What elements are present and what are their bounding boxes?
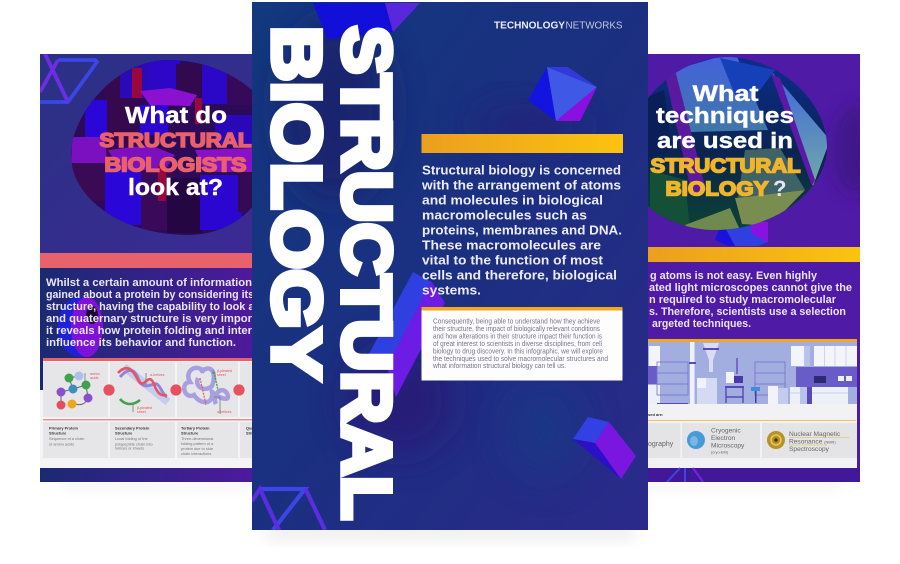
card captions: protein due to side <box>181 446 213 451</box>
card captions: Quaternary <box>246 426 268 430</box>
text: protein structure intro: Whilst a certain amount of information <box>46 277 252 289</box>
icon: ring shape behind text <box>58 297 103 357</box>
callout: white text box <box>422 307 622 380</box>
panel: centre cover page <box>252 2 648 530</box>
card captions: Sequence of a chain <box>49 436 84 441</box>
callout: white text box: the techniques used to solve macromolecular structures and <box>433 356 608 363</box>
diagram: secondary structure: β-pleated <box>137 406 152 410</box>
card: cryo-EM <box>682 423 760 458</box>
page shadow <box>60 474 840 540</box>
gold heading bar <box>422 134 623 153</box>
diagram: tertiary structure <box>184 368 232 414</box>
title: What techniques are used in Structural Biology: BIOLOGY <box>666 178 769 200</box>
diagram: primary structure <box>56 372 100 410</box>
title: What do Structural Biologists look at: BIOLOGISTS <box>104 154 246 176</box>
title: What do Structural Biologists look at: look at? <box>128 174 223 200</box>
panel: left page <box>40 54 268 482</box>
card captions: Secondary Protein <box>115 426 150 430</box>
card captions: chain interactions <box>181 451 211 456</box>
text: main description: systems. <box>422 282 481 298</box>
card captions: helices or sheets <box>115 446 144 450</box>
diagram: primary structure: amino <box>90 372 100 376</box>
card: NMR <box>762 423 857 458</box>
text: protein structure intro: gained about a protein by considering its <box>46 289 254 301</box>
title: What techniques are used in Structural Biology: ? <box>773 176 786 201</box>
text: main description <box>421 162 622 298</box>
text: protein structure intro <box>46 277 258 349</box>
card captions: Local folding of the <box>115 436 148 441</box>
logo: Technology Networks: TECHNOLOGY <box>494 20 565 32</box>
card captions: Tertiary Protein <box>181 426 210 430</box>
diagram: secondary structure <box>118 367 168 414</box>
text: protein structure intro: it reveals how protein folding and inter <box>46 325 253 337</box>
card captions: folding pattern of a <box>181 441 214 446</box>
title: What techniques are used in Structural Biology: techniques <box>656 103 794 128</box>
text: protein structure intro: structure, having the capability to look at <box>46 301 258 313</box>
text: techniques intro: s. Therefore, scientists use a selection <box>649 306 846 318</box>
diagram: tertiary structure: α-helices <box>217 410 232 414</box>
text: techniques intro: g atoms is not easy. Even highly <box>650 270 818 282</box>
text: main description: vital to the function of most <box>422 252 604 268</box>
title: Structural Biology vertical: STRUCTURAL <box>328 26 405 520</box>
text: main description: These macromolecules are <box>422 238 601 252</box>
diagram: primary structure: acids <box>90 376 99 380</box>
diagram: tertiary structure: β-pleated <box>217 369 232 373</box>
card captions: Primary Protein <box>49 426 79 430</box>
callout: white text box: their structure, the impact of biologically relevant conditions <box>433 326 600 333</box>
title: What techniques are used in Structural Biology: What <box>692 81 759 106</box>
text: main description: with the arrangement of atoms <box>421 178 621 192</box>
text: main description: Structural biology is concerned <box>422 162 621 178</box>
image: blob of molecular columns <box>71 60 252 235</box>
card captions: polypeptide chain into <box>115 442 153 446</box>
card captions: Structure <box>115 430 133 436</box>
connectors between stages <box>103 384 245 396</box>
title: What do Structural Biologists look at: What do <box>125 102 227 128</box>
card: crystallography: ography <box>648 441 674 448</box>
card: cryo-EM: (cryo-EM) <box>711 450 729 454</box>
text: main description: macromolecules such as <box>422 208 587 222</box>
callout: white text box: and how alterations in their structure impact their function is <box>433 334 602 340</box>
illustration: laboratory <box>648 342 857 404</box>
panel: right page <box>648 54 860 482</box>
card: NMR: Resonance (NMR) <box>789 438 836 446</box>
icon: wireframe foot <box>252 488 325 530</box>
callout: white text box: what information structural biology can tell us. <box>432 363 566 370</box>
text: techniques intro: argeted techniques. <box>652 318 751 330</box>
title: What do Structural Biologists look at: STRUCTURAL <box>100 130 252 152</box>
icon: gem under blob <box>715 222 768 246</box>
card captions: Structure <box>49 430 67 436</box>
panel: lab illustration and techniques <box>648 339 857 468</box>
callout: white text box: of great interest to scientists in diverse disciplines, from cell <box>433 341 602 348</box>
title: What do Structural Biologists look at <box>100 102 252 200</box>
title: What techniques are used in Structural Biology <box>650 81 800 201</box>
card: cryo-EM: Cryogenic <box>711 428 741 434</box>
card: cryo-EM: Microscopy <box>711 442 745 450</box>
callout: white text box: biology to drug discovery. In this infographic, we will explore <box>433 348 603 356</box>
icon: gem top edge <box>313 3 420 39</box>
text: main description: cells and therefore, biological <box>422 268 617 282</box>
wireframe at foot of page <box>648 468 860 482</box>
card captions: of amino acids <box>49 442 74 446</box>
text: protein structure intro: influence its behavior and function. <box>46 337 236 349</box>
gold band <box>648 247 860 262</box>
icon: wireframe cube <box>40 54 97 102</box>
icon: hexagonal gem <box>528 67 597 121</box>
text: main description: proteins, membranes and DNA. <box>422 222 622 238</box>
panel: protein structure diagrams <box>40 358 268 468</box>
image: blob of teal columns <box>648 57 827 230</box>
text: techniques intro: n required to study macromolecular <box>649 294 837 306</box>
text: protein structure intro: and quaternary structure is very impor <box>46 313 253 325</box>
card: crystallography <box>648 423 680 458</box>
title: Structural Biology vertical: BIOLOGY <box>258 26 335 380</box>
card captions: Three-dimensional <box>181 436 213 441</box>
callout: white text box: Consequently, being able to understand how they achieve <box>433 318 600 326</box>
card captions: Structure <box>181 430 199 436</box>
card: NMR: Nuclear Magnetic <box>789 431 841 438</box>
diagram: tertiary structure: sheet <box>217 373 226 377</box>
panel: lab illustration and techniques: sed are: <box>648 412 663 417</box>
title: What techniques are used in Structural Biology: are used in <box>657 128 793 153</box>
text: techniques intro: ated light microscopes cannot give the <box>649 282 852 294</box>
coral band <box>40 253 252 268</box>
card captions: Structure <box>246 430 264 436</box>
title: What techniques are used in Structural Biology: STRUCTURAL <box>650 156 800 178</box>
title: Structural Biology vertical <box>270 24 394 521</box>
diagram: secondary structure: α-helices <box>150 373 165 377</box>
logo: Technology Networks: NETWORKS <box>566 20 623 32</box>
text: main description: and molecules in biological <box>422 192 603 208</box>
card captions <box>49 427 252 455</box>
card: NMR: Spectroscopy <box>789 446 830 453</box>
icon: cuboid <box>573 417 636 479</box>
diagram: secondary structure: sheet <box>137 410 146 414</box>
text: techniques intro <box>649 270 852 330</box>
icon: purple prism <box>363 272 445 397</box>
card: cryo-EM: Electron <box>711 435 736 442</box>
logo: Technology Networks <box>494 22 622 28</box>
